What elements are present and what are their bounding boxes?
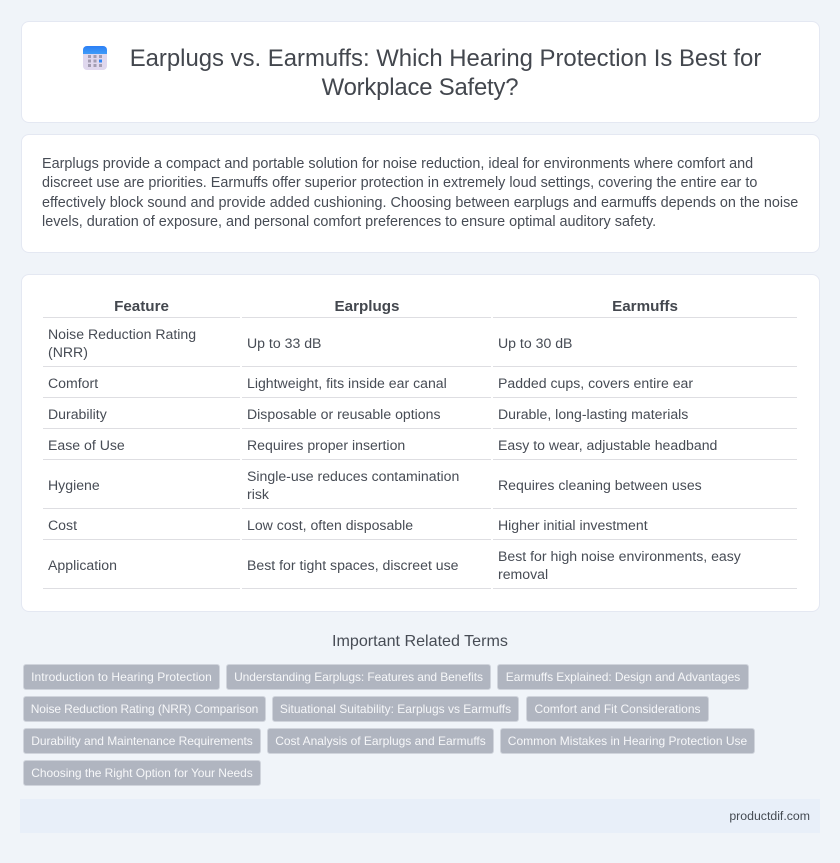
table panel	[20, 274, 820, 612]
footer source: productdif.com	[729, 809, 810, 823]
comparison table: Durable, long-lasting materials	[498, 406, 688, 422]
comparison table: Higher initial investment	[498, 517, 648, 533]
comparison table: Hygiene	[48, 477, 100, 493]
comparison table: Best for high noise environments, easy	[498, 548, 741, 564]
footer bar	[20, 799, 820, 833]
related term tags: Cost Analysis of Earplugs and Earmuffs	[275, 734, 486, 748]
comparison table: Single-use reduces contamination	[247, 468, 459, 484]
comparison table: Lightweight, fits inside ear canal	[247, 375, 447, 391]
related term tags: Common Mistakes in Hearing Protection Use	[508, 734, 747, 748]
title	[130, 45, 761, 101]
comparison table	[43, 298, 797, 589]
comparison table: Comfort	[48, 375, 98, 391]
comparison table: Requires proper insertion	[247, 437, 405, 453]
intro text: effectively block sound and provide added cushioning. Choosing between earplugs and earmuffs depends on the noise	[42, 194, 798, 210]
related term tags: Situational Suitability: Earplugs vs Earmuffs	[280, 702, 511, 716]
comparison table: Up to 30 dB	[498, 335, 572, 351]
related term tags: Earmuffs Explained: Design and Advantages	[506, 670, 740, 684]
intro text: levels, duration of exposure, and personal comfort preferences to ensure optimal auditory safety.	[42, 214, 656, 230]
related term tags: Introduction to Hearing Protection	[31, 670, 212, 684]
related term tags	[23, 664, 755, 786]
intro text: Earplugs provide a compact and portable solution for noise reduction, ideal for environments where comfort and	[42, 156, 753, 172]
comparison table: Cost	[48, 517, 77, 533]
comparison table: Up to 33 dB	[247, 335, 321, 351]
intro panel	[20, 134, 820, 252]
intro text	[42, 156, 798, 230]
related terms heading: Important Related Terms	[332, 632, 508, 650]
comparison table: removal	[498, 566, 548, 582]
comparison table: risk	[247, 486, 269, 502]
title: Earplugs vs. Earmuffs: Which Hearing Protection Is Best for	[130, 45, 761, 72]
comparison table: Ease of Use	[48, 437, 125, 453]
comparison table: (NRR)	[48, 344, 88, 360]
comparison table: Noise Reduction Rating	[48, 326, 196, 342]
related term tags: Noise Reduction Rating (NRR) Comparison	[31, 702, 258, 716]
related term tags: Durability and Maintenance Requirements	[31, 734, 253, 748]
comparison table: Earmuffs	[612, 298, 678, 315]
icon: calendar	[83, 46, 107, 70]
header panel	[20, 20, 820, 122]
comparison table: Low cost, often disposable	[247, 517, 413, 533]
comparison table: Disposable or reusable options	[247, 406, 441, 422]
related term tags: Understanding Earplugs: Features and Benefits	[234, 670, 483, 684]
related term tags: Comfort and Fit Considerations	[534, 702, 701, 716]
comparison table: Application	[48, 557, 117, 573]
comparison table: Feature	[114, 298, 169, 315]
comparison table: Padded cups, covers entire ear	[498, 375, 693, 391]
comparison table: Durability	[48, 406, 107, 422]
comparison table: Earplugs	[334, 298, 400, 315]
comparison table: Best for tight spaces, discreet use	[247, 557, 459, 573]
intro text: discreet use are priorities. Earmuffs offer superior protection in extremely loud settings, covering the entire ear to	[42, 175, 757, 191]
related term tags: Choosing the Right Option for Your Needs	[31, 766, 253, 780]
title: Workplace Safety?	[322, 74, 518, 101]
comparison table: Requires cleaning between uses	[498, 477, 702, 493]
comparison table: Easy to wear, adjustable headband	[498, 437, 717, 453]
